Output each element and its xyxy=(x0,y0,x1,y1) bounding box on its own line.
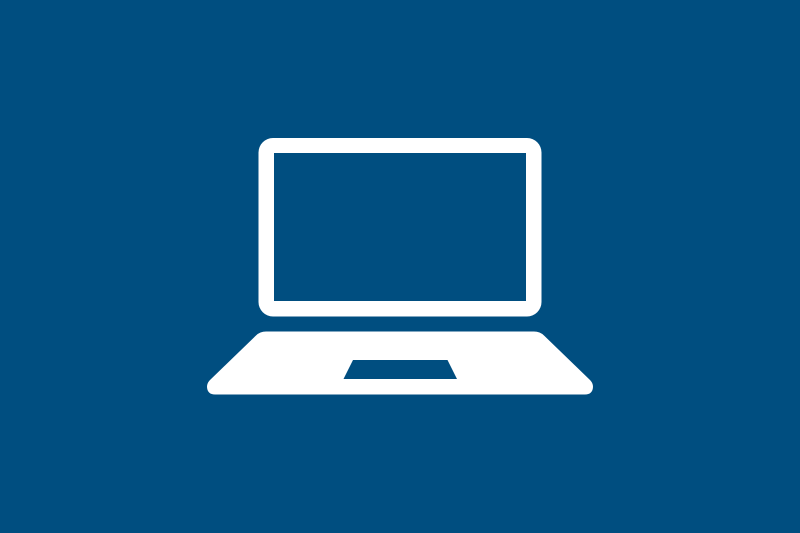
icon: laptop screen xyxy=(258,138,542,316)
icon: laptop base with trackpad xyxy=(207,332,593,394)
